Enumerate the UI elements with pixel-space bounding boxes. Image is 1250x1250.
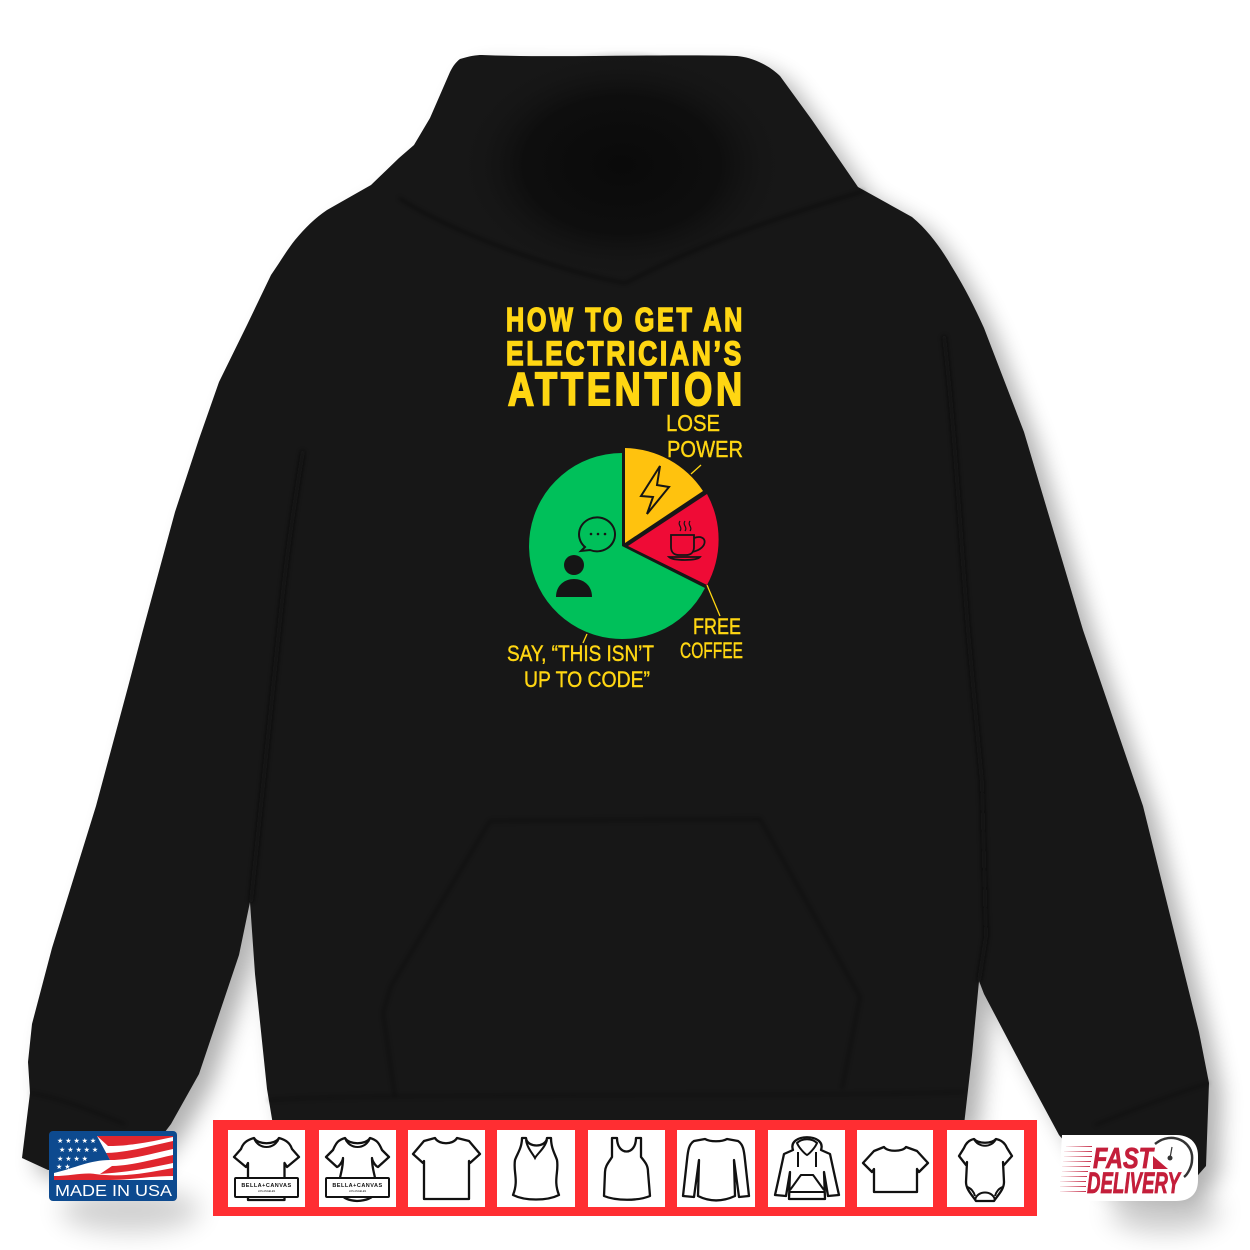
label: lose power: POWER bbox=[667, 436, 743, 462]
flag canton bbox=[54, 1136, 110, 1173]
icon: person bbox=[556, 555, 592, 597]
hood interior shading bbox=[457, 50, 787, 280]
seams bbox=[30, 191, 1209, 1125]
tile: bella canvas women's tee: BELLA+CANVAS bbox=[332, 1183, 383, 1189]
badge: fast delivery: FAST bbox=[1093, 1143, 1155, 1175]
label: say this isn't up to code: SAY, “THIS ISN’T bbox=[507, 641, 654, 666]
badge: fast delivery: DELIVERY bbox=[1087, 1167, 1182, 1200]
speedometer bbox=[1155, 1138, 1192, 1177]
tile: hoodie bbox=[768, 1130, 845, 1207]
tile: racerback tank bbox=[497, 1130, 575, 1207]
slice: say this isn't up to code bbox=[529, 453, 705, 639]
tile: bella canvas women's tee: LOS ANGELES bbox=[349, 1190, 367, 1193]
badge: fast delivery bbox=[1058, 1135, 1198, 1201]
badge: made in usa: ★ ★ bbox=[56, 1163, 70, 1171]
tile: long sleeve bbox=[677, 1130, 755, 1207]
badge: made in usa: ★ ★ ★ ★ ★ bbox=[59, 1146, 98, 1154]
badge: made in usa: ★ ★ ★ ★ bbox=[57, 1155, 88, 1163]
label: free coffee bbox=[680, 614, 743, 663]
label: free coffee: FREE bbox=[693, 614, 741, 639]
icon: lightning bolt bbox=[641, 466, 669, 514]
label: lose power bbox=[666, 410, 743, 462]
title: ATTENTION bbox=[508, 363, 746, 415]
leader lines bbox=[583, 465, 720, 643]
tile: t-shirt bbox=[408, 1130, 485, 1207]
badge: made in usa: MADE IN USA bbox=[55, 1183, 173, 1200]
tile: bella canvas tee: BELLA+CANVAS bbox=[241, 1183, 292, 1189]
tile: bella canvas tee: LOS ANGELES bbox=[258, 1190, 276, 1193]
flag stripes bbox=[54, 1136, 173, 1180]
tile: baby onesie bbox=[947, 1130, 1024, 1207]
speed lines bbox=[1060, 1146, 1092, 1192]
pie chart bbox=[529, 448, 720, 643]
label: lose power: LOSE bbox=[666, 410, 720, 436]
label: free coffee: COFFEE bbox=[680, 638, 743, 663]
garment type strip bbox=[213, 1120, 1037, 1216]
tile: bella canvas tee bbox=[228, 1130, 305, 1207]
badge: made in usa bbox=[49, 1131, 177, 1201]
badge: made in usa: ★ ★ ★ ★ ★ bbox=[57, 1137, 96, 1145]
label: say this isn't up to code: UP TO CODE” bbox=[524, 667, 650, 692]
title: ELECTRICIAN’S bbox=[506, 335, 744, 373]
label: say this isn't up to code bbox=[507, 641, 654, 692]
title bbox=[506, 301, 746, 415]
title: HOW TO GET AN bbox=[506, 301, 745, 338]
tile: crop tee bbox=[857, 1130, 933, 1207]
tile: tank top bbox=[588, 1130, 665, 1207]
icon: speech bubble bbox=[579, 517, 615, 551]
slice: lose power bbox=[625, 448, 703, 543]
tile: bella canvas women's tee bbox=[319, 1130, 396, 1207]
icon: coffee cup bbox=[669, 521, 705, 560]
slice: free coffee bbox=[628, 494, 719, 585]
